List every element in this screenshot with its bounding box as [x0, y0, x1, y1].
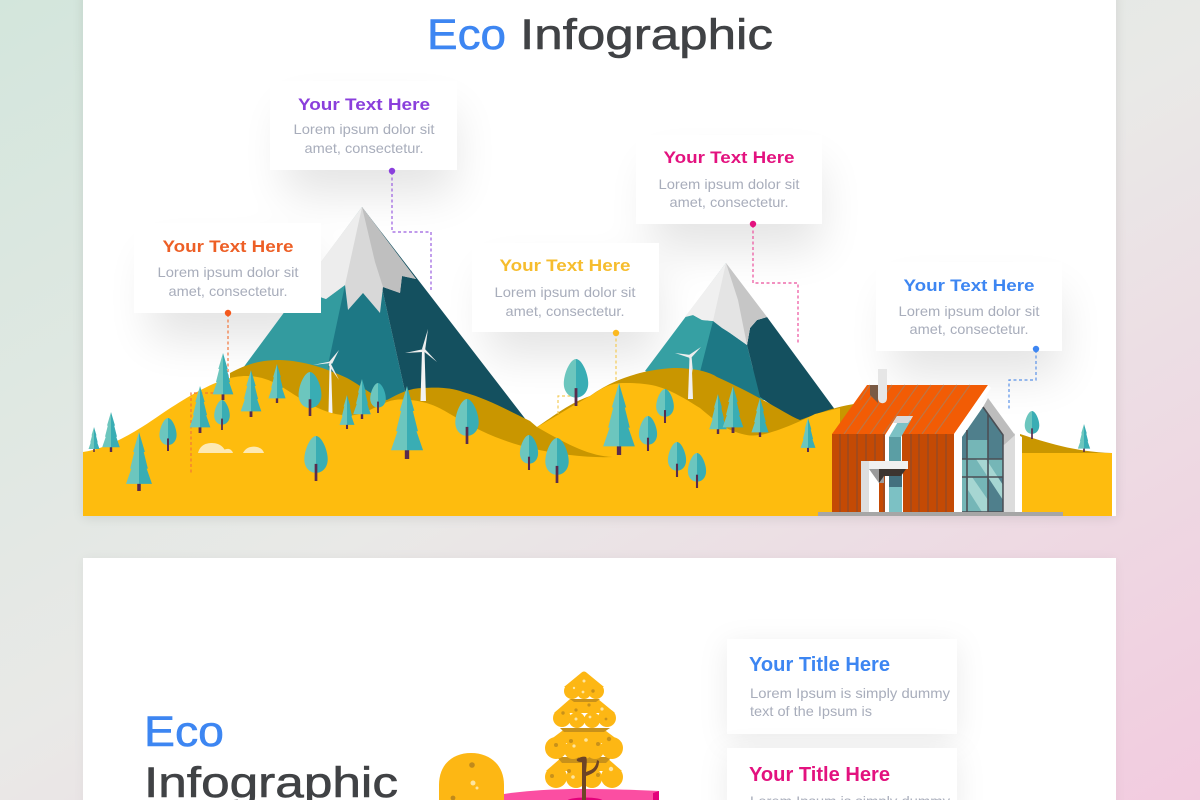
callout: purple: Lorem ipsum dolor sit [294, 121, 435, 137]
callout: pink: Lorem ipsum dolor sit [658, 176, 800, 192]
callout: orange: Your Text Here [162, 237, 294, 256]
callout: orange: amet, consectetur. [168, 283, 288, 299]
connector: yellow [558, 333, 616, 462]
icon: pink platform [504, 789, 659, 800]
tree bottom layer [545, 757, 623, 788]
tree top layer [564, 672, 604, 699]
wind turbine 2 [405, 329, 437, 401]
wind turbine 3 [675, 347, 701, 399]
house door and porch [861, 461, 908, 512]
callout: yellow: Lorem ipsum dolor sit [494, 284, 636, 300]
second slide title [144, 708, 398, 800]
title: Eco [427, 11, 506, 59]
house dormer [885, 416, 913, 462]
house chimney [870, 369, 887, 403]
title: Infographic [520, 11, 773, 59]
callout: blue: Your Text Here [904, 276, 1034, 295]
house glass window [962, 407, 1003, 512]
wind turbine 1 [313, 350, 339, 413]
second slide title: Eco [144, 708, 224, 756]
trees [88, 353, 1090, 491]
callout: yellow [472, 243, 659, 336]
house roof [832, 385, 988, 434]
title [427, 11, 773, 59]
connector: orange [191, 314, 228, 473]
yellow strip right of house [1020, 453, 1112, 516]
callout: blue: Lorem ipsum dolor sit [898, 303, 1040, 319]
large mountain [243, 207, 530, 425]
connector: purple [392, 172, 431, 292]
house wall [832, 434, 954, 512]
callout: purple: Your Text Here [298, 95, 430, 114]
callout: pink: amet, consectetur. [670, 194, 788, 210]
right dark hill [1020, 434, 1112, 470]
callout: orange: Lorem ipsum dolor sit [158, 264, 299, 280]
callout: pink: Your Text Here [664, 148, 794, 167]
rear dark hills [230, 360, 870, 516]
connector: pink [753, 225, 798, 343]
callout: blue [876, 262, 1062, 352]
card: pink title [727, 748, 957, 800]
panel: second slide [83, 558, 1116, 800]
callout: purple [270, 81, 457, 174]
clouds on hill [198, 443, 264, 453]
tree third layer [545, 728, 623, 759]
house [818, 369, 1063, 516]
card: blue title: text of the Ipsum is [750, 703, 872, 719]
yellow foreground hills [83, 376, 840, 516]
card: blue title [727, 639, 957, 734]
small mountain [645, 263, 836, 430]
callout: yellow: amet, consectetur. [506, 303, 624, 319]
house white end wall [954, 398, 1022, 512]
callout: blue: amet, consectetur. [910, 321, 1028, 337]
house base [818, 512, 1063, 516]
icon: yellow tree [545, 672, 623, 800]
connector: blue [1009, 350, 1036, 411]
callout: pink [636, 135, 822, 227]
callout: purple: amet, consectetur. [304, 140, 424, 156]
card: blue title: Your Title Here [749, 654, 890, 676]
card: blue title: Lorem Ipsum is simply dummy [750, 685, 950, 701]
callout: orange [134, 223, 321, 316]
card: pink title: Your Title Here [749, 764, 890, 786]
callout: yellow: Your Text Here [500, 256, 630, 275]
panel: eco infographic landscape [83, 0, 1116, 516]
tree second layer [553, 699, 616, 728]
icon: yellow bush [439, 753, 504, 800]
